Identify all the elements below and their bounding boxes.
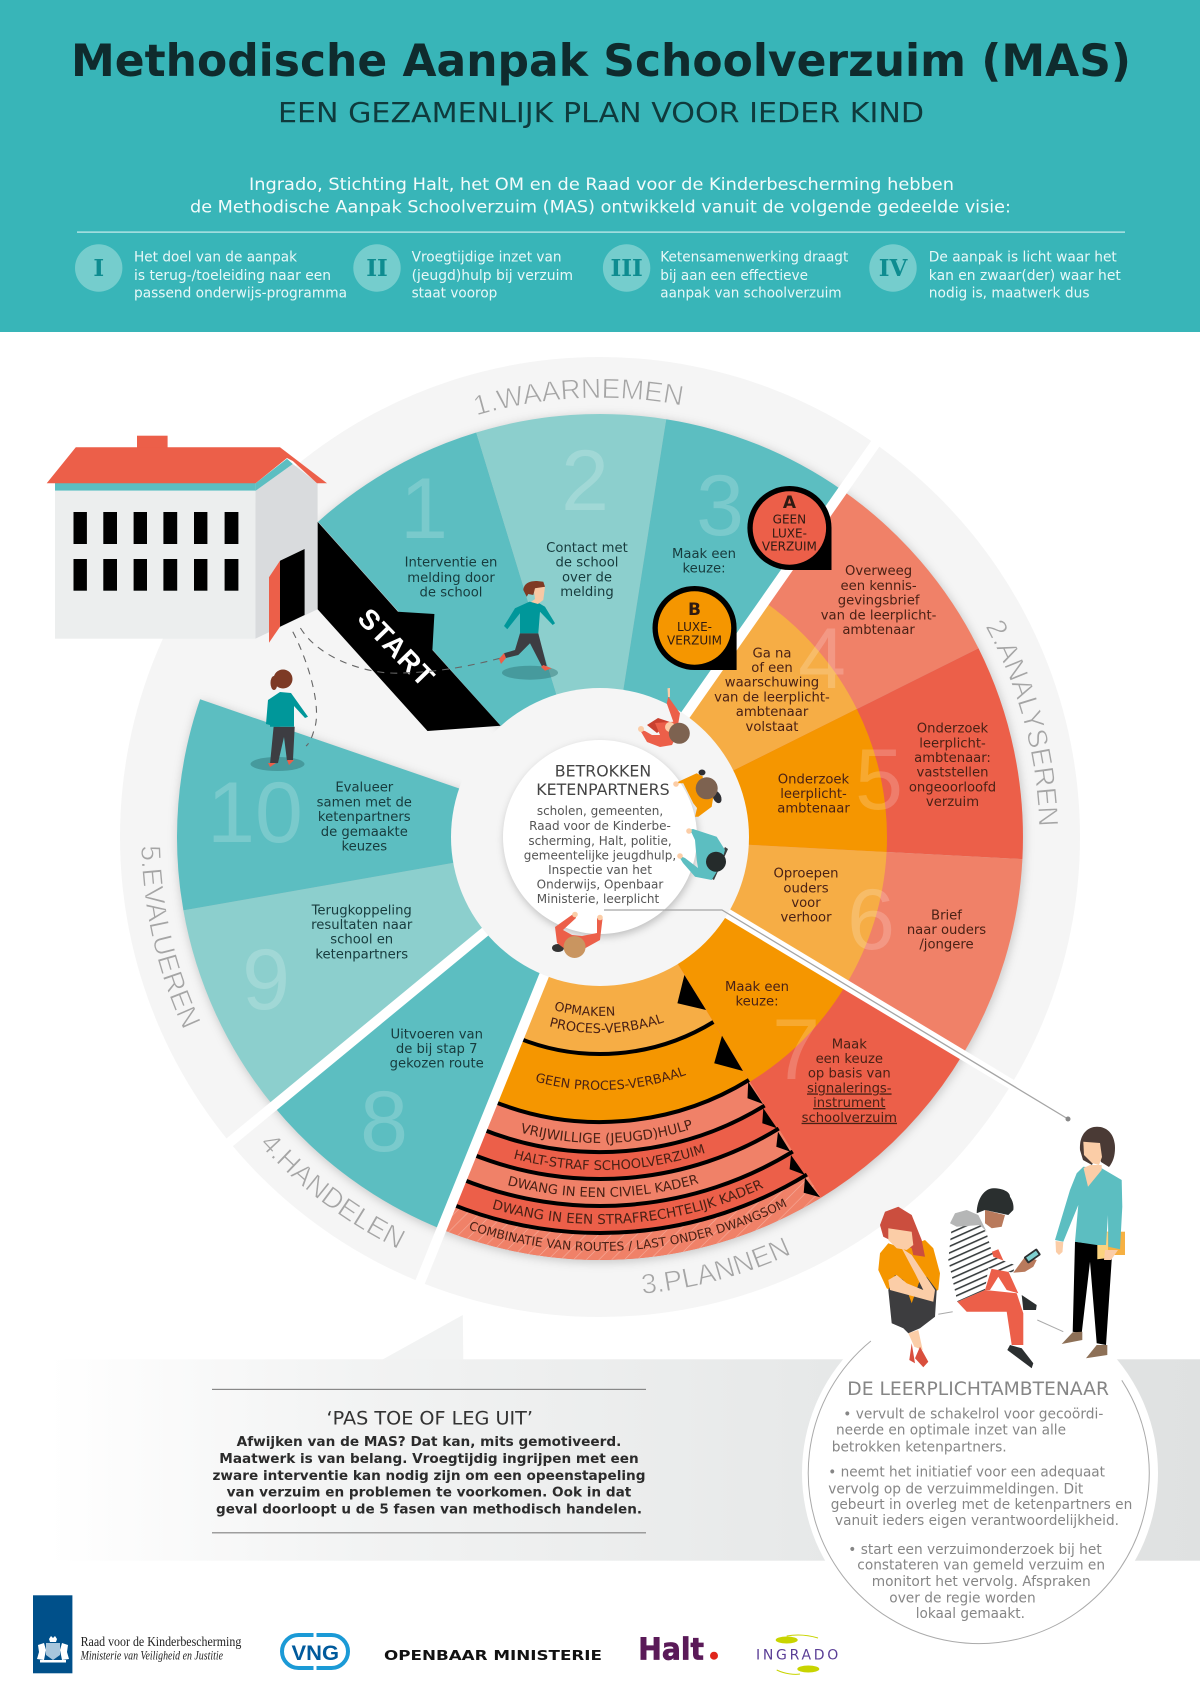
wedges	[177, 414, 1023, 1260]
step numbers: 7	[772, 1002, 820, 1098]
step 5 inner text: leerplicht-	[780, 787, 847, 802]
logo: Openbaar Ministerie: OPENBAAR MINISTERIE	[384, 1649, 602, 1664]
choice pin B: LUXE-	[677, 620, 712, 634]
choice pin A: GEEN	[773, 512, 806, 526]
step 6 inner text	[774, 867, 838, 926]
step 3 text: keuze:	[682, 562, 726, 577]
step 5 inner text: ambtenaar	[777, 802, 850, 817]
panel: pas toe of leg uit	[0, 1315, 1200, 1561]
step 7 outer text: signalerings-	[807, 1081, 892, 1096]
walking paths	[293, 628, 501, 746]
step 7 outer text: een keuze	[816, 1052, 883, 1067]
phase label 4: 4.HANDELEN	[263, 1138, 405, 1248]
body text: zware interventie kan nodig zijn om een opeenstapeling	[212, 1468, 646, 1484]
outer ring	[120, 357, 1080, 1317]
step 4 outer text: een kennis-	[841, 579, 917, 594]
step 2 text	[546, 541, 628, 600]
center list: gemeentelijke jeugdhulp,	[524, 848, 676, 862]
step 5 outer text	[909, 722, 996, 810]
step 4 inner text: ambtenaar	[736, 705, 809, 720]
center heading: BETROKKEN	[555, 762, 651, 781]
route labels: HALT-STRAF SCHOOLVERZUIM	[514, 1144, 704, 1170]
bullet 1: betrokken ketenpartners.	[832, 1439, 1007, 1455]
step 10 text: ketenpartners	[318, 810, 411, 825]
step 1 wedge	[318, 432, 600, 837]
step 8 wedge	[274, 837, 600, 1229]
route bands of step 7	[442, 837, 821, 1260]
figure: sitting girl	[878, 1207, 940, 1367]
route labels: GEEN PROCES-VERBAAL	[536, 1068, 686, 1090]
step 9 text	[311, 903, 413, 962]
step 10 text: Evalueer	[335, 781, 394, 796]
school building	[47, 436, 327, 643]
step numbers: 6	[847, 872, 895, 968]
step 6 outer text	[907, 908, 986, 953]
bullet 3: constateren van gemeld verzuim en	[857, 1558, 1105, 1574]
step numbers: 9	[242, 932, 290, 1028]
step numbers: 2	[561, 433, 609, 529]
partner figure: orange	[673, 770, 723, 817]
step 5 outer text: Onderzoek	[917, 722, 989, 737]
start arrow: START	[352, 602, 441, 693]
step 7 wedge	[442, 837, 963, 1260]
route labels: VRIJWILLIGE (JEUGD)HULP	[522, 1120, 692, 1146]
step 2 text: de school	[556, 556, 618, 571]
step 1 text: melding door	[407, 571, 495, 586]
step 5 wedge	[600, 648, 1023, 859]
connector to leerplichtambtenaar	[604, 910, 1070, 1122]
vision IV: De aanpak is licht waar het	[929, 250, 1117, 266]
step 7 outer text	[802, 1037, 897, 1126]
center list: Ministerie, leerplicht	[537, 892, 660, 906]
vision II	[353, 244, 573, 302]
logo: Halt: Halt	[638, 1632, 704, 1667]
bullet 3: monitort het vervolg. Afspraken	[872, 1574, 1091, 1590]
vision I: passend onderwijs-programma	[134, 286, 347, 302]
step 4 inner text: volstaat	[746, 720, 798, 735]
step 9 text: ketenpartners	[315, 947, 408, 962]
phase label 1: 1.WAARNEMEN	[475, 379, 682, 414]
logo: Raad voor de Kinderbescherming	[33, 1595, 241, 1673]
step 10 text: de gemaakte	[321, 825, 408, 840]
phase label 3: 3.PLANNEN	[642, 1238, 790, 1294]
body text: van verzuim en problemen te voorkomen. Ook in dat	[227, 1485, 632, 1501]
icon: crest	[37, 1636, 69, 1662]
body text: Maatwerk is van belang. Vroegtijdig ingrijpen met een	[219, 1451, 639, 1467]
logo: Raad voor de Kinderbescherming: Raad voor de Kinderbescherming	[81, 1635, 241, 1650]
center list	[524, 804, 676, 906]
step 6 inner text: Oproepen	[774, 867, 838, 882]
vision II: (jeugd)hulp bij verzuim	[412, 268, 573, 284]
step 6 outer text: /jongere	[919, 938, 974, 953]
step 4 outer text	[821, 564, 937, 638]
step 8 text: gekozen route	[390, 1057, 484, 1072]
choice pin B: VERZUIM	[667, 633, 722, 647]
step 7 inner text	[725, 980, 789, 1010]
figure: standing woman	[1055, 1127, 1125, 1358]
title: Methodische Aanpak Schoolverzuim (MAS)	[71, 36, 1131, 87]
header panel	[0, 0, 1200, 332]
step 9 text: resultaten naar	[311, 918, 413, 933]
step 5 outer text: vaststellen	[917, 766, 988, 781]
step 7 outer text: schoolverzuim	[802, 1111, 897, 1126]
step numbers: 3	[696, 458, 744, 554]
step 6 inner text: verhoor	[780, 911, 832, 926]
hub ring	[451, 688, 749, 986]
body text: geval doorloopt u de 5 fasen van methodisch handelen.	[216, 1501, 642, 1517]
route labels	[470, 1002, 787, 1252]
body text	[212, 1434, 646, 1517]
step 5 outer text: verzuim	[926, 795, 979, 810]
panel: de leerplichtambtenaar	[802, 1295, 1158, 1651]
center list: Inspectie van het	[548, 863, 652, 877]
step 4 outer text: ambtenaar	[842, 623, 915, 638]
step numbers	[207, 433, 903, 1170]
route labels: COMBINATIE VAN ROUTES / LAST ONDER DWANGSOM	[470, 1198, 787, 1252]
step 2 text: Contact met	[546, 541, 628, 556]
vision I: Het doel van de aanpak	[134, 250, 298, 266]
step 6 wedge	[600, 837, 1022, 1055]
bullet 2	[828, 1465, 1132, 1529]
step 9 wedge	[183, 837, 600, 1106]
inner orange segments	[600, 602, 887, 1082]
step 10 wedge	[177, 699, 600, 910]
bullet 2: • neemt het initiatief voor een adequaat	[828, 1465, 1105, 1481]
step 5 inner text	[777, 772, 850, 817]
choice pin A: VERZUIM	[762, 540, 817, 554]
intro text	[190, 175, 1011, 216]
bullet 3	[848, 1542, 1105, 1622]
center list: scholen, gemeenten,	[537, 804, 663, 818]
bullet 2: vervolg op de verzuimmeldingen. Dit	[828, 1481, 1084, 1497]
step 2 wedge	[476, 414, 666, 837]
heading: ‘PAS TOE OF LEG UIT’	[326, 1408, 533, 1429]
vision II: staat voorop	[412, 286, 497, 302]
vision III: III	[610, 255, 643, 282]
bullet 1: • vervult de schakelrol voor gecoördi-	[843, 1406, 1103, 1422]
step 4 inner text: Ga na	[753, 646, 791, 661]
figure: sitting boy	[948, 1188, 1041, 1368]
choice pin B	[653, 586, 737, 670]
step 8 text: de bij stap 7	[396, 1042, 478, 1057]
step 2 text: melding	[560, 585, 614, 600]
step 7 outer text: Maak	[832, 1037, 867, 1052]
choice pin A	[747, 486, 832, 570]
choice pin A: LUXE-	[772, 526, 807, 540]
step 2 text: over de	[562, 570, 612, 585]
logo: Ingrado: INGRADO	[756, 1648, 838, 1664]
bullet 3: over de regie worden	[889, 1590, 1036, 1606]
step 4 inner text: of een	[751, 661, 793, 676]
bullet 1	[832, 1406, 1103, 1455]
step 4 inner text	[714, 646, 830, 735]
step 4 outer text: van de leerplicht-	[821, 608, 937, 623]
step 6 inner text: ouders	[783, 881, 829, 896]
logo: VNG	[282, 1632, 348, 1671]
vision IV: IV	[879, 255, 908, 282]
vision IV	[869, 244, 1121, 302]
choice pin A: A	[783, 493, 797, 513]
start arrow	[318, 522, 501, 731]
logo: Raad voor de Kinderbescherming: Ministerie van Veiligheid en Justitie	[80, 1647, 223, 1662]
step 4 outer text: Overweeg	[845, 564, 912, 579]
vision IV: kan en zwaar(der) waar het	[929, 268, 1121, 284]
step numbers: 8	[360, 1074, 408, 1170]
step 9 text: Terugkoppeling	[311, 903, 412, 918]
center list: Raad voor de Kinderbe-	[529, 819, 671, 833]
route labels: DWANG IN EEN CIVIEL KADER	[508, 1175, 699, 1197]
step 1 text	[405, 556, 497, 601]
step 4 inner text: waarschuwing	[725, 676, 819, 691]
step 3 wedge	[600, 419, 843, 837]
figure: runner	[499, 581, 558, 680]
partner figure: red top	[638, 688, 690, 747]
phase label 5: 5.EVALUEREN	[142, 847, 200, 1028]
logo: Ingrado	[756, 1635, 838, 1674]
vision II: II	[366, 255, 388, 282]
body text: Afwijken van de MAS? Dat kan, mits gemotiveerd.	[237, 1434, 621, 1450]
vision I: I	[93, 255, 104, 282]
vision III	[603, 244, 849, 302]
vision I: is terug-/toeleiding naar een	[134, 268, 331, 284]
vision III: Ketensamenwerking draagt	[660, 250, 849, 266]
vision III: bij aan een effectieve	[660, 268, 808, 284]
step 4 wedge	[600, 490, 978, 837]
step 5 outer text: ambtenaar:	[914, 751, 991, 766]
wheel	[120, 357, 1080, 1317]
center list: Onderwijs, Openbaar	[537, 878, 663, 892]
step 10 text: samen met de	[317, 795, 412, 810]
step 6 outer text: Brief	[931, 908, 962, 923]
step 4 outer text: gevingsbrief	[838, 594, 920, 609]
step 3 text	[672, 547, 736, 577]
heading: DE LEERPLICHTAMBTENAAR	[847, 1379, 1109, 1400]
step 8 text: Uitvoeren van	[390, 1027, 483, 1042]
vision IV: nodig is, maatwerk dus	[929, 286, 1090, 302]
step 4 inner text: van de leerplicht-	[714, 690, 830, 705]
step 10 text	[317, 781, 412, 854]
step 7 outer text: op basis van	[808, 1067, 891, 1082]
center circle	[503, 740, 697, 934]
step 5 inner text: Onderzoek	[778, 772, 850, 787]
bullet 1: neerde en optimale inzet van alle	[836, 1422, 1066, 1438]
phase dividers	[222, 436, 1020, 1291]
bullet 3: lokaal gemaakt.	[916, 1606, 1025, 1622]
step 3 text: Maak een	[672, 547, 736, 562]
step 1 text: de school	[420, 586, 482, 601]
route labels: PROCES-VERBAAL	[550, 1014, 664, 1034]
center heading	[536, 762, 670, 799]
step 7 inner text: Maak een	[725, 980, 789, 995]
phase label 2: 2.ANALYSEREN	[986, 620, 1058, 824]
step 8 text	[390, 1027, 484, 1072]
subtitle: EEN GEZAMENLIJK PLAN VOOR IEDER KIND	[278, 97, 924, 129]
step 7 outer text: instrument	[813, 1096, 885, 1111]
bullet 3: • start een verzuimonderzoek bij het	[848, 1542, 1102, 1558]
step 5 outer text: leerplicht-	[919, 736, 986, 751]
intro text: de Methodische Aanpak Schoolverzuim (MAS) ontwikkeld vanuit de volgende gedeelde visie:	[190, 198, 1011, 216]
figure: standing person	[250, 670, 308, 771]
step 1 text: Interventie en	[405, 556, 497, 571]
choice pin B: B	[688, 600, 701, 620]
arrowheads	[677, 975, 820, 1197]
step numbers: 10	[207, 765, 303, 861]
partner figure: red bottom	[552, 912, 603, 958]
step numbers: 5	[855, 732, 903, 828]
route labels: OPMAKEN	[555, 1002, 614, 1016]
partner figure: teal	[677, 828, 728, 880]
step numbers: 1	[400, 461, 448, 557]
step numbers: 4	[798, 611, 846, 707]
step 9 text: school en	[330, 933, 393, 948]
route labels: DWANG IN EEN STRAFRECHTELIJK KADER	[492, 1180, 764, 1224]
vision I	[75, 244, 347, 302]
logo: VNG: VNG	[292, 1642, 339, 1665]
step 10 text: keuzes	[342, 840, 387, 854]
step 5 outer text: ongeoorloofd	[909, 780, 996, 795]
step 6 outer text: naar ouders	[907, 923, 986, 938]
bullet 2: vanuit ieders eigen verantwoordelijkheid.	[835, 1513, 1119, 1529]
vision II: Vroegtijdige inzet van	[412, 250, 562, 266]
step 6 inner text: voor	[791, 896, 821, 911]
bullet 2: gebeurt in overleg met de ketenpartners en	[831, 1497, 1132, 1513]
intro text: Ingrado, Stichting Halt, het OM en de Raad voor de Kinderbescherming hebben	[249, 175, 954, 194]
vision III: aanpak van schoolverzuim	[660, 286, 842, 302]
center list: scherming, Halt, politie,	[528, 834, 672, 848]
step 7 inner text: keuze:	[735, 995, 779, 1010]
center heading: KETENPARTNERS	[536, 780, 670, 799]
